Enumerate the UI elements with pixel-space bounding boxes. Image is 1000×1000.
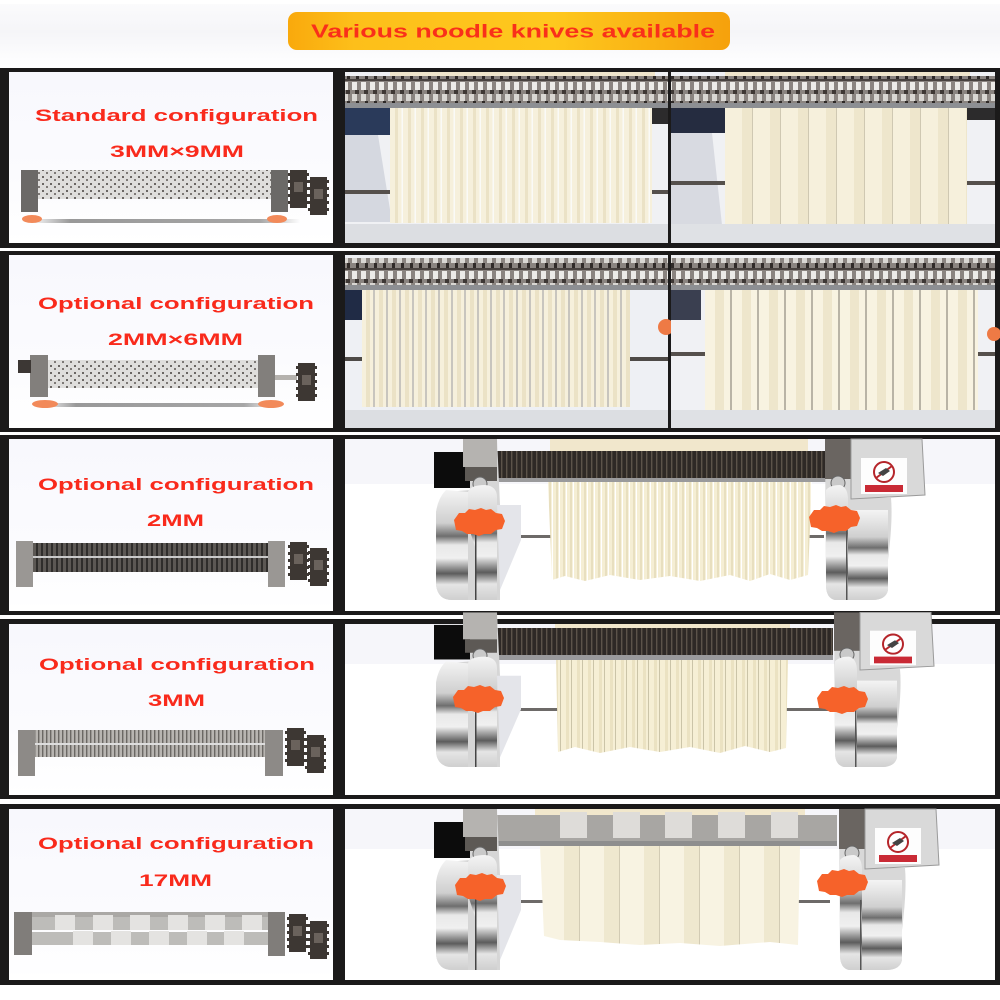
row 1: standard configuration 3MM×9MM [0,68,1000,248]
photo: 3MM noodle machine [345,612,995,795]
panel: knife 3MM×9MM: 3MM×9MM [110,143,244,161]
panel: knife 3MM: Optional configuration [39,656,315,674]
panel: knife 2MM×6MM: 2MM×6MM [108,331,243,349]
photo: 6MM noodles [671,255,1000,428]
title banner: Various noodle knives available [311,20,715,42]
photo: 9MM noodles [671,72,995,243]
panel: knife 2MM×6MM: Optional configuration [38,295,314,313]
panel: knife 2MM: Optional configuration [38,476,314,494]
photo: 3MM noodles [345,72,668,243]
panel: knife 17MM [9,809,333,980]
row 2: optional configuration 2MM×6MM [0,251,1000,432]
panel: knife 2MM×6MM [9,255,333,428]
photo: 17MM noodle machine [345,809,995,980]
panel: knife 3MM [9,624,333,795]
photo: 2MM noodle machine [345,439,995,611]
photo: 2MM noodles [345,255,674,428]
title banner [288,12,730,50]
row 3: optional configuration 2MM [0,435,1000,615]
panel: knife 17MM: Optional configuration [38,835,314,853]
row 5: optional configuration 17MM [0,804,1000,985]
row 4: optional configuration 3MM [0,612,1000,799]
panel: knife 2MM [9,439,333,611]
panel: knife 2MM: 2MM [147,512,204,530]
panel: knife 17MM: 17MM [139,872,212,890]
panel: knife 3MM×9MM: Standard configuration [35,107,318,125]
top header band [0,4,1000,66]
panel: knife 3MM×9MM [9,72,333,243]
panel: knife 3MM: 3MM [148,692,205,710]
